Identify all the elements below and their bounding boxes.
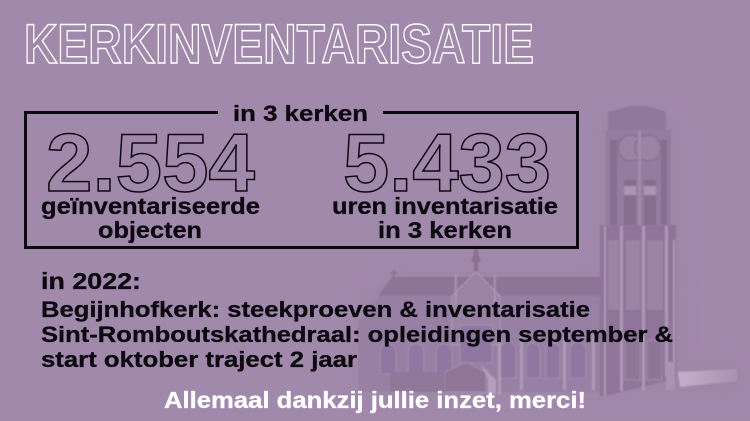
text block: plans for 2022: Begijnhofkerk: steekproeven & inventarisatie [41, 297, 590, 322]
nave body [358, 296, 600, 392]
stat: objects [41, 116, 260, 243]
tower upper [606, 130, 671, 226]
stat: objects: geïnventariseerde [41, 193, 260, 219]
text block: plans for 2022: Sint-Romboutskathedraal: opleidingen september & [41, 322, 673, 347]
tower crown [608, 106, 666, 130]
closing thanks: Allemaal dankzij jullie inzet, merci! [164, 387, 586, 413]
stat: hours: 5.433 [343, 116, 551, 209]
stat: hours: uren inventarisatie [332, 193, 558, 219]
statistics frame [26, 101, 578, 248]
text block: plans for 2022: in 2022: [41, 268, 141, 294]
stat: objects: 2.554 [46, 116, 255, 209]
text block: plans for 2022 [41, 268, 673, 372]
side porch [445, 362, 486, 392]
tower lower panels [608, 240, 663, 310]
nave buttresses [455, 275, 595, 395]
frame heading: in 3 kerken [233, 101, 368, 126]
stat: hours: in 3 kerken [378, 217, 512, 243]
nave roof [378, 277, 600, 296]
stat: hours [332, 116, 558, 243]
ground patch [678, 369, 737, 387]
tower ribs [604, 226, 675, 396]
tower base windows [625, 340, 662, 380]
illustration: church [358, 106, 742, 396]
title: KERKINVENTARISATIE [24, 12, 534, 75]
transept gable [452, 272, 500, 345]
nave windows [380, 325, 586, 378]
text block: plans for 2022: start oktober traject 2 jaar [41, 347, 357, 372]
tower lower [600, 225, 676, 396]
church halo [360, 115, 742, 395]
clock faces [618, 135, 644, 161]
tower openings [610, 140, 667, 225]
stat: objects: objecten [98, 217, 202, 243]
